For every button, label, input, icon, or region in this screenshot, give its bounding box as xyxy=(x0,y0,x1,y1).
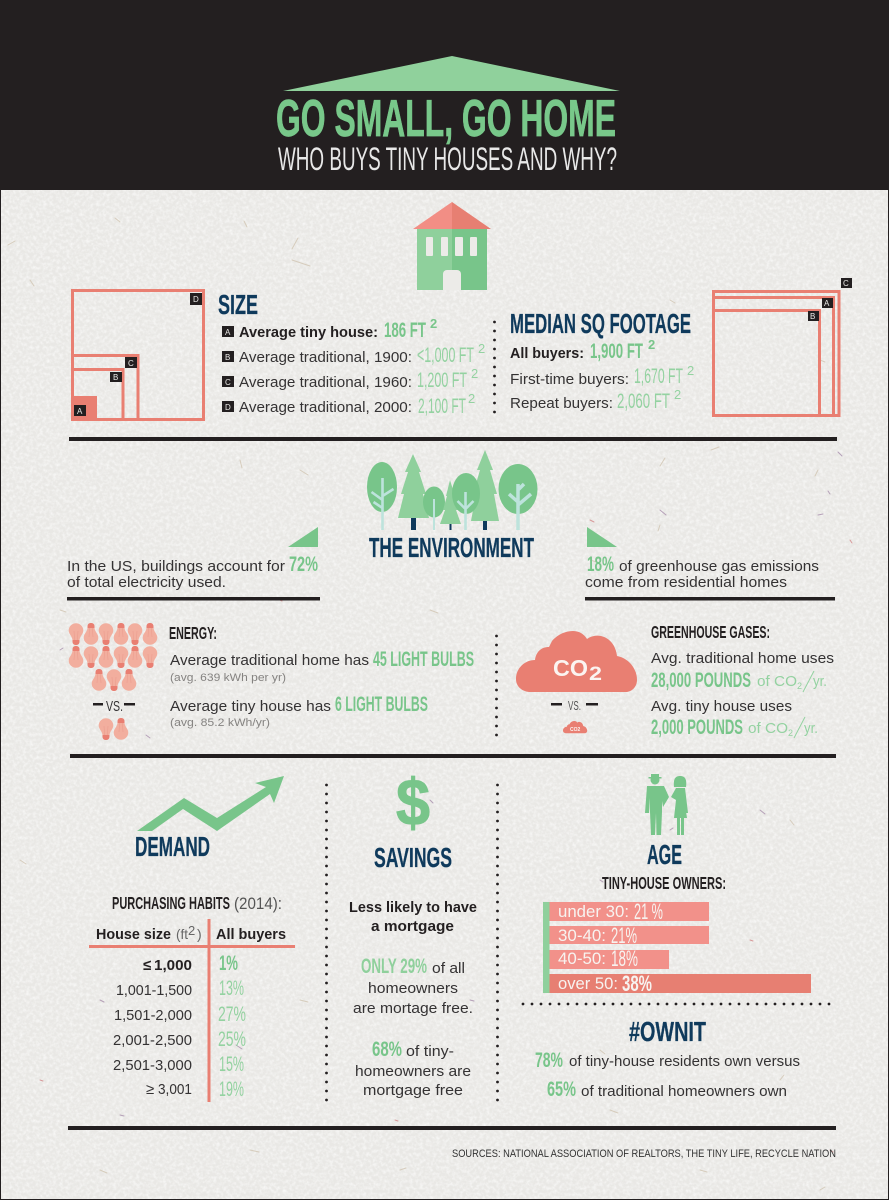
icon: light bulbs: VS. xyxy=(106,698,123,715)
panel: greenhouse gases: 28,000 POUNDS xyxy=(651,668,751,692)
panel: own it xyxy=(535,1016,800,1101)
icon: co2 clouds: CO xyxy=(553,655,588,681)
panel: greenhouse gases: 2 xyxy=(788,728,793,738)
panel: size: 2 xyxy=(468,391,475,406)
bar chart: tiny-house owners by age xyxy=(543,873,811,996)
stat: emissions: come from residential homes xyxy=(585,574,787,591)
bar chart: tiny-house owners by age: 30-40: xyxy=(558,926,606,945)
table: purchasing habits: 27% xyxy=(218,1002,246,1026)
table: purchasing habits: 13% xyxy=(219,976,244,1000)
chart: size squares xyxy=(71,290,204,421)
heading: demand: DEMAND xyxy=(135,831,210,862)
panel: size: 2,100 FT xyxy=(418,394,466,418)
title: GO SMALL, GO HOME xyxy=(276,90,616,148)
stat: emissions xyxy=(585,527,819,591)
panel: energy: (avg. 85.2 kWh/yr) xyxy=(170,717,270,729)
bar chart: tiny-house owners by age: 21 % xyxy=(634,899,663,924)
panel: size: 2 xyxy=(471,366,478,381)
table: purchasing habits: 1,001-1,500 xyxy=(116,982,192,999)
panel: own it: of tiny-house residents own versus xyxy=(569,1053,800,1070)
icon: roof xyxy=(283,56,620,91)
table: purchasing habits: ≥ xyxy=(146,1081,154,1098)
panel: greenhouse gases: Avg. traditional home uses xyxy=(651,650,834,667)
panel: median square footage: 2,060 FT xyxy=(617,389,670,413)
stat: electricity: 72% xyxy=(289,552,318,576)
icon: couple xyxy=(645,774,688,835)
stat: electricity: of total electricity used. xyxy=(67,574,226,591)
chart: median squares: B xyxy=(810,312,815,321)
panel: greenhouse gases: of CO xyxy=(748,720,788,737)
bar chart: tiny-house owners by age: TINY-HOUSE OWNERS: xyxy=(602,873,726,893)
panel: greenhouse gases: 2,000 POUNDS xyxy=(651,715,743,739)
table: purchasing habits: ) xyxy=(197,926,202,942)
panel: size: Average traditional, 2000: xyxy=(239,399,412,416)
panel: median square footage: First-time buyers: xyxy=(510,371,629,388)
chart: size squares: D xyxy=(193,295,199,304)
bar chart: tiny-house owners by age: 40-50: xyxy=(558,949,606,968)
panel: greenhouse gases: 2 xyxy=(797,681,802,691)
heading: age: AGE xyxy=(647,839,682,870)
bar chart: tiny-house owners by age: 38% xyxy=(622,971,652,996)
panel: median square footage: All buyers: xyxy=(510,345,584,362)
panel: savings: homeowners xyxy=(368,980,458,997)
panel: greenhouse gases: yr. xyxy=(804,720,818,737)
panel: greenhouse gases: yr. xyxy=(813,673,827,690)
panel: savings: mortgage free xyxy=(363,1082,463,1099)
icon: co2 clouds: 2 xyxy=(589,664,602,685)
table: purchasing habits: 2 xyxy=(188,923,195,938)
icon: co2 clouds xyxy=(516,631,637,733)
icon: co2 clouds: VS. xyxy=(568,698,581,713)
icon: dollar sign: $ xyxy=(396,765,430,839)
panel: size: C xyxy=(225,378,231,387)
icon: co2 clouds: CO2 xyxy=(570,727,580,733)
chart: median squares: A xyxy=(824,299,830,308)
panel: energy: Average tiny house has xyxy=(170,698,331,715)
panel: energy: ENERGY: xyxy=(169,623,217,643)
icon: demand arrow xyxy=(137,776,284,831)
stat: electricity xyxy=(67,527,318,591)
chart: size squares: A xyxy=(77,407,83,416)
table: purchasing habits: 1,000 xyxy=(154,957,192,974)
table: purchasing habits xyxy=(89,893,295,1102)
icon: house xyxy=(413,202,491,290)
panel: median square footage: 2 xyxy=(648,337,655,352)
panel: size: Average tiny house: xyxy=(239,324,378,341)
table: purchasing habits: All buyers xyxy=(216,926,286,943)
table: purchasing habits: 2,501-3,000 xyxy=(113,1057,192,1074)
panel: size xyxy=(218,289,485,418)
stat: electricity: In the US, buildings account for xyxy=(67,558,285,575)
table: purchasing habits: House size xyxy=(96,926,171,943)
panel: size: <1,000 FT xyxy=(417,343,474,367)
table: purchasing habits: 25% xyxy=(218,1027,246,1051)
panel: savings: ONLY 29% xyxy=(361,954,427,978)
panel: greenhouse gases xyxy=(651,622,834,739)
panel: size: 2 xyxy=(430,316,437,331)
table: purchasing habits: 1% xyxy=(219,951,238,975)
panel: energy: Average traditional home has xyxy=(170,652,369,669)
stat: emissions: 18% xyxy=(587,552,614,576)
panel: energy: 6 LIGHT BULBS xyxy=(335,692,428,716)
table: purchasing habits: 3,001 xyxy=(158,1081,192,1098)
bar chart: tiny-house owners by age: over 50: xyxy=(558,974,618,993)
panel: median square footage: 1,900 FT xyxy=(590,339,643,363)
table: purchasing habits: (ft xyxy=(176,926,188,942)
panel: size: Average traditional, 1960: xyxy=(239,374,412,391)
panel: size: Average traditional, 1900: xyxy=(239,349,412,366)
panel: size: 1,200 FT xyxy=(417,368,467,392)
table: purchasing habits: 1,501-2,000 xyxy=(114,1007,192,1024)
panel: median square footage: 1,670 FT xyxy=(634,364,683,388)
table: purchasing habits: 15% xyxy=(219,1052,244,1076)
header band xyxy=(0,0,889,190)
panel: median square footage: 2 xyxy=(687,363,694,378)
panel: savings xyxy=(349,842,477,1099)
panel: savings: a mortgage xyxy=(371,918,454,935)
chart: size squares: C xyxy=(128,359,134,368)
panel: size: B xyxy=(225,353,230,362)
panel: savings: of all xyxy=(432,960,465,977)
panel: median square footage: 2 xyxy=(674,387,681,402)
bar chart: tiny-house owners by age: under 30: xyxy=(558,902,629,921)
panel: savings: SAVINGS xyxy=(374,842,452,873)
panel: savings: are mortage free. xyxy=(353,1000,473,1017)
panel: savings: of tiny- xyxy=(406,1043,454,1060)
icon: light bulbs xyxy=(69,623,157,740)
heading: size: SIZE xyxy=(218,289,258,320)
subtitle: WHO BUYS TINY HOUSES AND WHY? xyxy=(278,141,617,177)
table: purchasing habits: PURCHASING HABITS xyxy=(112,893,230,913)
bar chart: tiny-house owners by age: 21% xyxy=(611,923,637,948)
panel: greenhouse gases: Avg. tiny house uses xyxy=(651,698,792,715)
heading: the environment: THE ENVIRONMENT xyxy=(369,532,534,563)
panel: savings: 68% xyxy=(372,1037,402,1061)
chart: median squares: C xyxy=(843,279,849,288)
panel: own it: 65% xyxy=(547,1077,576,1101)
panel: savings: Less likely to have xyxy=(349,899,477,916)
chart: size squares: B xyxy=(113,373,118,382)
panel: own it: #OWNIT xyxy=(629,1016,706,1047)
panel: own it: 78% xyxy=(535,1048,563,1072)
icon: trees xyxy=(367,450,538,530)
panel: size: 2 xyxy=(478,341,485,356)
panel: savings: homeowners are xyxy=(355,1063,471,1080)
table: purchasing habits: ≤ xyxy=(143,957,151,974)
stat: emissions: of greenhouse gas emissions xyxy=(619,558,819,575)
panel: own it: of traditional homeowners own xyxy=(581,1083,787,1100)
table: purchasing habits: 2,001-2,500 xyxy=(113,1032,192,1049)
panel: greenhouse gases: of CO xyxy=(757,673,797,690)
panel: median square footage: Repeat buyers: xyxy=(510,395,613,412)
panel: greenhouse gases: GREENHOUSE GASES: xyxy=(651,622,770,642)
table: purchasing habits: 19% xyxy=(219,1077,244,1101)
panel: size: 186 FT xyxy=(384,318,426,342)
panel: size: A xyxy=(225,328,231,337)
heading: median: MEDIAN SQ FOOTAGE xyxy=(510,308,691,339)
table: purchasing habits: (2014): xyxy=(234,894,282,913)
panel: energy: 45 LIGHT BULBS xyxy=(373,647,474,671)
panel: energy xyxy=(169,623,474,729)
chart: median squares xyxy=(714,278,852,416)
bar chart: tiny-house owners by age: 18% xyxy=(611,946,638,971)
panel: median square footage xyxy=(510,308,694,413)
panel: size: D xyxy=(225,403,231,412)
panel: energy: (avg. 639 kWh per yr) xyxy=(170,672,286,684)
